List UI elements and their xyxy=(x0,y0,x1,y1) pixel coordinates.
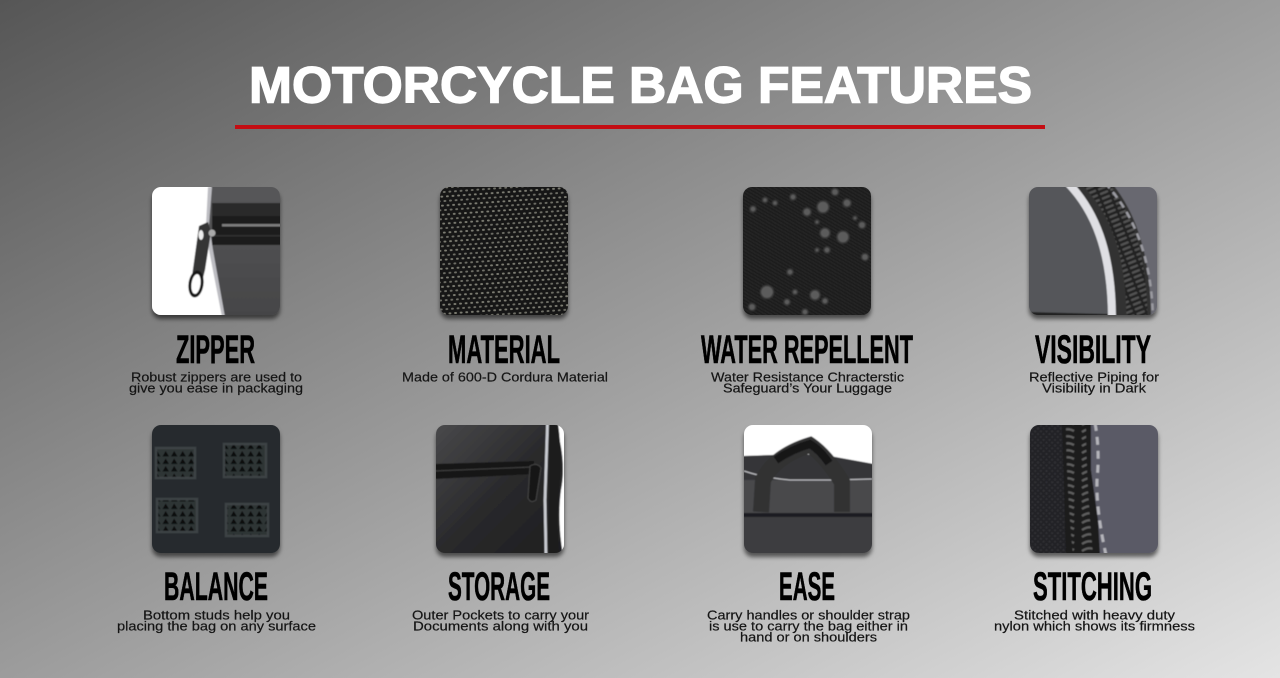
description: Documents along with you xyxy=(413,620,588,634)
feature: visibility xyxy=(1027,180,1159,396)
icon: carry handles photo xyxy=(742,423,874,555)
description: placing the bag on any surface xyxy=(117,620,316,634)
description xyxy=(994,608,1195,634)
heading: STORAGE xyxy=(448,565,550,609)
heading: BALANCE xyxy=(164,565,268,609)
heading: VISIBILITY xyxy=(1035,328,1151,372)
icon: mesh fabric photo xyxy=(440,187,568,315)
heading: MATERIAL xyxy=(448,328,560,372)
title underline xyxy=(235,125,1045,129)
description xyxy=(707,608,910,644)
description: Made of 600-D Cordura Material xyxy=(402,370,608,384)
feature: stitching xyxy=(994,423,1195,634)
description: Stitched with heavy duty xyxy=(1014,608,1176,622)
title: MOTORCYCLE BAG FEATURES xyxy=(249,56,1032,114)
description: Robust zippers are used to xyxy=(131,370,302,384)
description: nylon which shows its firmness xyxy=(994,620,1195,634)
description xyxy=(412,608,589,634)
description: Reflective Piping for xyxy=(1029,370,1159,384)
description xyxy=(129,370,303,396)
description: Carry handles or shoulder strap xyxy=(707,608,910,622)
icon: zipper photo xyxy=(150,185,282,317)
feature: ease xyxy=(707,423,910,644)
heading: ZIPPER xyxy=(176,328,255,372)
description xyxy=(711,370,904,396)
feature: water repellent xyxy=(701,185,913,396)
description: hand or on shoulders xyxy=(740,630,877,644)
description: Water Resistance Chracterstic xyxy=(711,370,904,384)
description xyxy=(1029,370,1159,396)
description: Safeguard’s Your Luggage xyxy=(723,382,892,396)
description: Visibility in Dark xyxy=(1042,382,1147,396)
icon: bottom studs photo xyxy=(150,423,282,555)
description: Bottom studs help you xyxy=(143,608,290,622)
feature: zipper xyxy=(129,185,303,396)
heading: STITCHING xyxy=(1033,565,1152,609)
feature: material xyxy=(402,187,608,384)
heading: WATER REPELLENT xyxy=(701,328,913,372)
description xyxy=(117,608,316,634)
icon: outer pocket photo xyxy=(434,423,568,555)
description: is use to carry the bag either in xyxy=(709,620,908,634)
feature: storage xyxy=(412,423,589,634)
icon: heavy duty stitching photo xyxy=(1028,423,1160,555)
feature: balance xyxy=(117,423,316,634)
description: Outer Pockets to carry your xyxy=(412,608,589,622)
heading: EASE xyxy=(779,565,835,609)
icon: water droplets photo xyxy=(741,185,873,317)
icon: reflective piping photo xyxy=(1027,180,1159,322)
description: give you ease in packaging xyxy=(129,382,303,396)
